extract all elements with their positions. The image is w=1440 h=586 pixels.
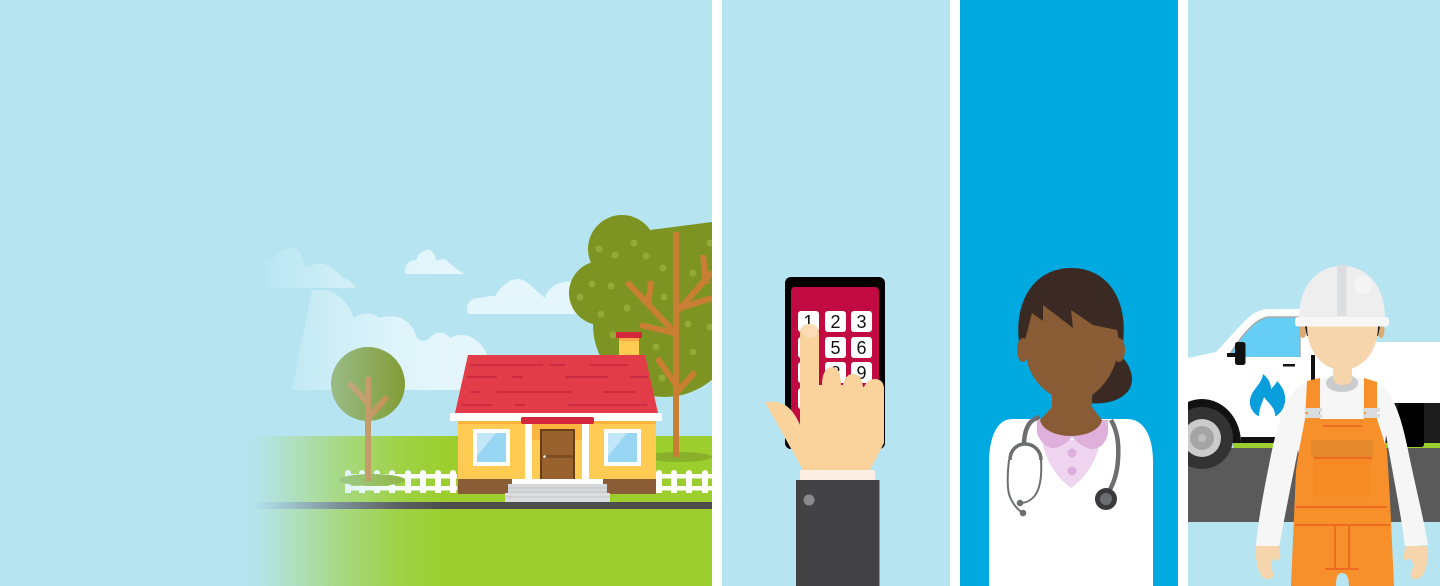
hand (765, 324, 884, 470)
van (1163, 309, 1440, 469)
roof (455, 355, 658, 413)
flame logo (1250, 374, 1285, 417)
road (1188, 448, 1440, 522)
shirt and arms (1256, 377, 1428, 547)
door (540, 429, 575, 479)
phone (785, 277, 885, 449)
front wheel (1188, 399, 1241, 469)
collar (1037, 420, 1108, 449)
collar (1326, 374, 1358, 392)
face and neck (1025, 305, 1119, 436)
eave (450, 413, 662, 421)
panel: doctor (960, 0, 1178, 586)
steps (505, 479, 610, 502)
foundation (458, 479, 656, 494)
cuff (800, 470, 875, 480)
wing mirror (1227, 342, 1246, 365)
key digits: 6 (856, 338, 867, 358)
right window (604, 429, 641, 466)
white picket fence (345, 470, 712, 493)
small tree (331, 347, 405, 486)
awning (521, 417, 594, 424)
left window (473, 429, 510, 466)
engineer (1256, 265, 1428, 586)
panel: home scene (0, 0, 737, 586)
hard hat (1295, 265, 1389, 326)
keypad (798, 311, 872, 409)
walls (458, 421, 656, 479)
key digits: 8 (830, 363, 841, 383)
panel: keypad phone (722, 0, 950, 586)
key digits: 5 (830, 338, 841, 358)
hands (1256, 546, 1428, 579)
chimney (616, 332, 642, 357)
stethoscope (1008, 417, 1118, 516)
road (262, 502, 712, 509)
big tree (569, 215, 712, 462)
columns (525, 423, 589, 479)
key digits: 3 (856, 312, 867, 332)
panel: gas engineer (1163, 0, 1440, 586)
ears (1017, 338, 1125, 362)
head (1300, 324, 1384, 370)
key digits: 2 (830, 312, 841, 332)
clouds (280, 248, 577, 390)
hair back and bun (1018, 268, 1132, 403)
house (450, 332, 662, 502)
van window (1230, 317, 1300, 357)
key digits: 1 (803, 312, 814, 332)
ground (258, 436, 712, 586)
divider (950, 0, 960, 586)
sleeve (796, 480, 880, 586)
divider (712, 0, 722, 586)
blouse (1042, 440, 1100, 488)
key digits: 9 (856, 363, 867, 383)
overalls (1291, 378, 1394, 586)
white coat (989, 419, 1153, 586)
key digits (803, 312, 867, 383)
left fade overlay (0, 248, 429, 586)
neck (1333, 368, 1352, 385)
divider (1178, 0, 1188, 586)
